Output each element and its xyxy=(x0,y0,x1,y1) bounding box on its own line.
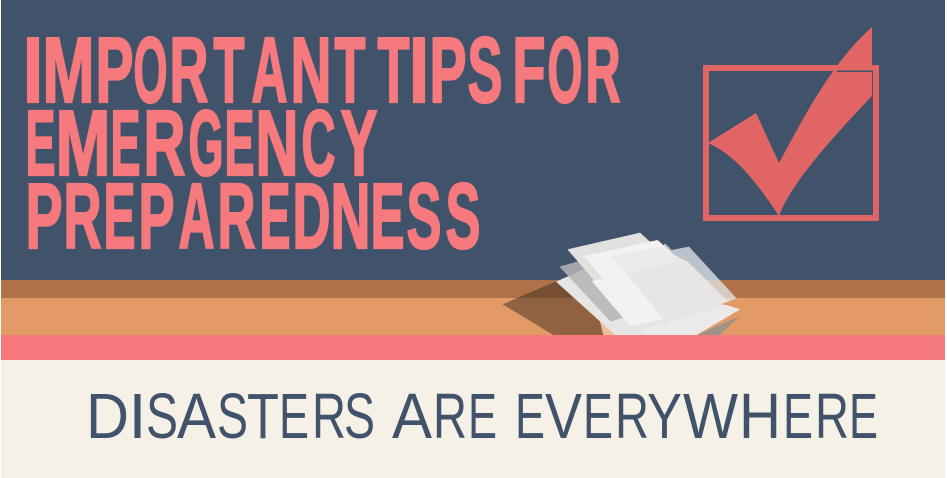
title: P xyxy=(430,18,466,122)
pink band xyxy=(1,335,945,360)
subtitle: Y xyxy=(647,380,682,452)
subtitle: R xyxy=(433,380,467,452)
subtitle: E xyxy=(468,380,497,452)
subtitle: S xyxy=(146,380,178,452)
title: S xyxy=(406,164,442,268)
title: G xyxy=(188,91,224,195)
subtitle: A xyxy=(177,380,216,452)
title: O xyxy=(134,18,168,122)
title: T xyxy=(378,18,410,122)
subtitle: E xyxy=(279,380,309,452)
title: N xyxy=(290,18,332,122)
title: T xyxy=(214,18,244,122)
title: I xyxy=(23,18,43,122)
subtitle: R xyxy=(815,380,849,452)
title: S xyxy=(468,18,502,122)
title: E xyxy=(104,164,136,268)
title: E xyxy=(26,91,56,195)
subtitle: E xyxy=(583,380,613,452)
title: Y xyxy=(340,91,378,195)
subtitle: R xyxy=(615,380,649,452)
title: N xyxy=(256,91,298,195)
subtitle xyxy=(86,380,878,452)
title: E xyxy=(260,164,290,268)
subtitle: H xyxy=(739,380,781,452)
title: N xyxy=(330,164,370,268)
title: F xyxy=(512,18,546,122)
title: T xyxy=(334,18,366,122)
title: E xyxy=(224,91,254,195)
title: R xyxy=(586,18,620,122)
title: R xyxy=(64,164,102,268)
title: R xyxy=(144,91,186,195)
title: I xyxy=(409,18,429,122)
title: P xyxy=(26,164,62,268)
title: D xyxy=(292,164,330,268)
subtitle: W xyxy=(683,380,739,452)
subtitle: A xyxy=(392,380,432,452)
subtitle: S xyxy=(344,380,375,452)
title: C xyxy=(302,91,336,195)
title: R xyxy=(170,18,208,122)
title: S xyxy=(446,164,480,268)
title: E xyxy=(110,91,140,195)
subtitle: S xyxy=(217,380,248,452)
subtitle: D xyxy=(86,380,129,452)
title: M xyxy=(56,91,110,195)
title: E xyxy=(370,164,404,268)
icon: checkbox with check mark xyxy=(703,27,879,221)
title: A xyxy=(252,18,288,122)
subtitle: T xyxy=(247,380,279,452)
subtitle: E xyxy=(849,380,878,452)
desk: orange surface xyxy=(1,298,945,335)
title: A xyxy=(178,164,214,268)
title xyxy=(23,18,620,268)
title: M xyxy=(42,18,94,122)
title: P xyxy=(96,18,134,122)
icon: stack of papers with shadow xyxy=(503,233,740,335)
subtitle: E xyxy=(515,380,545,452)
subtitle: V xyxy=(545,380,582,452)
title: R xyxy=(218,164,256,268)
subtitle: R xyxy=(312,380,346,452)
cream footer band xyxy=(1,360,945,478)
desk: brown back edge xyxy=(1,280,945,298)
title: P xyxy=(138,164,174,268)
subtitle: I xyxy=(128,380,146,452)
subtitle: E xyxy=(783,380,813,452)
title: O xyxy=(548,18,582,122)
